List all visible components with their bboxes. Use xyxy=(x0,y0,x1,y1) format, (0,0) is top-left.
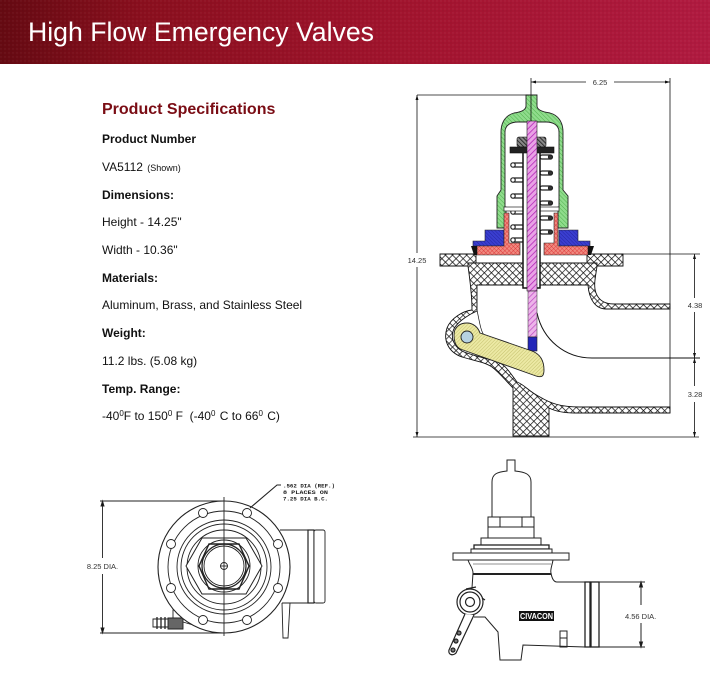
stem xyxy=(527,121,537,351)
diagram: valve cross-section xyxy=(408,78,702,437)
drain plug xyxy=(560,631,567,647)
red seat xyxy=(477,213,588,255)
lever assembly xyxy=(449,587,485,655)
temperature range: -40 xyxy=(102,409,119,423)
dimension labels: 3.28 xyxy=(688,390,702,399)
lever handle xyxy=(282,603,290,638)
body casting xyxy=(440,254,670,436)
bolt note: 7.25 DIA B.C. xyxy=(283,496,328,502)
dome xyxy=(492,460,531,517)
diagram: side exterior view xyxy=(449,460,656,660)
bonnet xyxy=(497,95,568,228)
outlet xyxy=(280,530,325,603)
flow passage line xyxy=(537,313,700,358)
dimensions: Width - 10.36" xyxy=(102,243,178,257)
temperature range: F to 150 xyxy=(124,409,168,423)
outlet dimension xyxy=(625,582,656,647)
temperature range: Temp. Range: xyxy=(102,382,180,396)
lever arm xyxy=(454,323,544,377)
title: High Flow Emergency Valves xyxy=(28,17,374,47)
centre line xyxy=(223,497,225,636)
materials: Aluminum, Brass, and Stainless Steel xyxy=(102,298,302,312)
product number: VA5112 (Shown) xyxy=(102,160,181,174)
label: 4.56 DIA: 4.56 DIA. xyxy=(625,612,656,621)
weight: Weight: xyxy=(102,326,146,340)
bolt note: .562 DIA (REF.) xyxy=(283,482,335,490)
temperature range: 0 xyxy=(119,409,124,418)
diameter dimension xyxy=(87,501,224,633)
materials xyxy=(102,271,302,312)
temperature range: 0 xyxy=(168,409,173,418)
bolt note xyxy=(283,482,335,502)
base steps xyxy=(453,538,569,560)
brand plate: CIVACON xyxy=(520,612,553,621)
dimension labels: 6.25 xyxy=(593,78,607,87)
temperature range xyxy=(102,382,280,423)
weight xyxy=(102,326,197,368)
product number xyxy=(102,132,196,174)
materials: Materials: xyxy=(102,271,158,285)
blue flange rings xyxy=(473,230,590,246)
flange corner seals xyxy=(471,246,594,255)
dimensions: Height - 14.25" xyxy=(102,215,182,229)
dimension arrowheads xyxy=(416,80,696,437)
locknut xyxy=(510,137,554,153)
dimensions: Dimensions: xyxy=(102,188,174,202)
bolt note: 8 PLACES ON xyxy=(283,489,329,496)
dimension labels xyxy=(408,78,702,399)
temperature range: F (-40 xyxy=(172,409,211,423)
weight: 11.2 lbs. (5.08 kg) xyxy=(102,354,197,368)
leader line xyxy=(250,485,281,508)
dimension lines xyxy=(413,78,700,437)
guide tube xyxy=(523,147,540,288)
lever pivot xyxy=(461,331,473,343)
temperature range: C) xyxy=(264,409,280,423)
heading: product specifications: Product Specifications xyxy=(102,101,275,118)
body band xyxy=(473,573,551,575)
flange circles xyxy=(158,501,290,633)
dimension labels: 4.38 xyxy=(688,301,702,310)
outlet collar xyxy=(585,582,645,647)
side fitting xyxy=(153,610,193,629)
bolt holes xyxy=(166,508,282,624)
header banner xyxy=(0,0,710,64)
spring xyxy=(511,155,552,242)
hex nut xyxy=(488,517,534,538)
temperature range: 0 xyxy=(211,409,216,418)
label: 8.25 DIA: 8.25 DIA. xyxy=(87,562,118,571)
diagram: top view xyxy=(87,482,335,638)
dimensions xyxy=(102,188,182,257)
centre mark xyxy=(220,562,228,570)
spring retainer xyxy=(504,207,559,211)
body outline xyxy=(468,560,585,660)
hex nut xyxy=(186,538,262,594)
dimension labels: 14.25 xyxy=(408,256,426,265)
temperature range: 0 xyxy=(258,409,263,418)
panel: product specifications xyxy=(102,101,302,423)
temperature range: C to 66 xyxy=(216,409,259,423)
product number: Product Number xyxy=(102,132,196,146)
